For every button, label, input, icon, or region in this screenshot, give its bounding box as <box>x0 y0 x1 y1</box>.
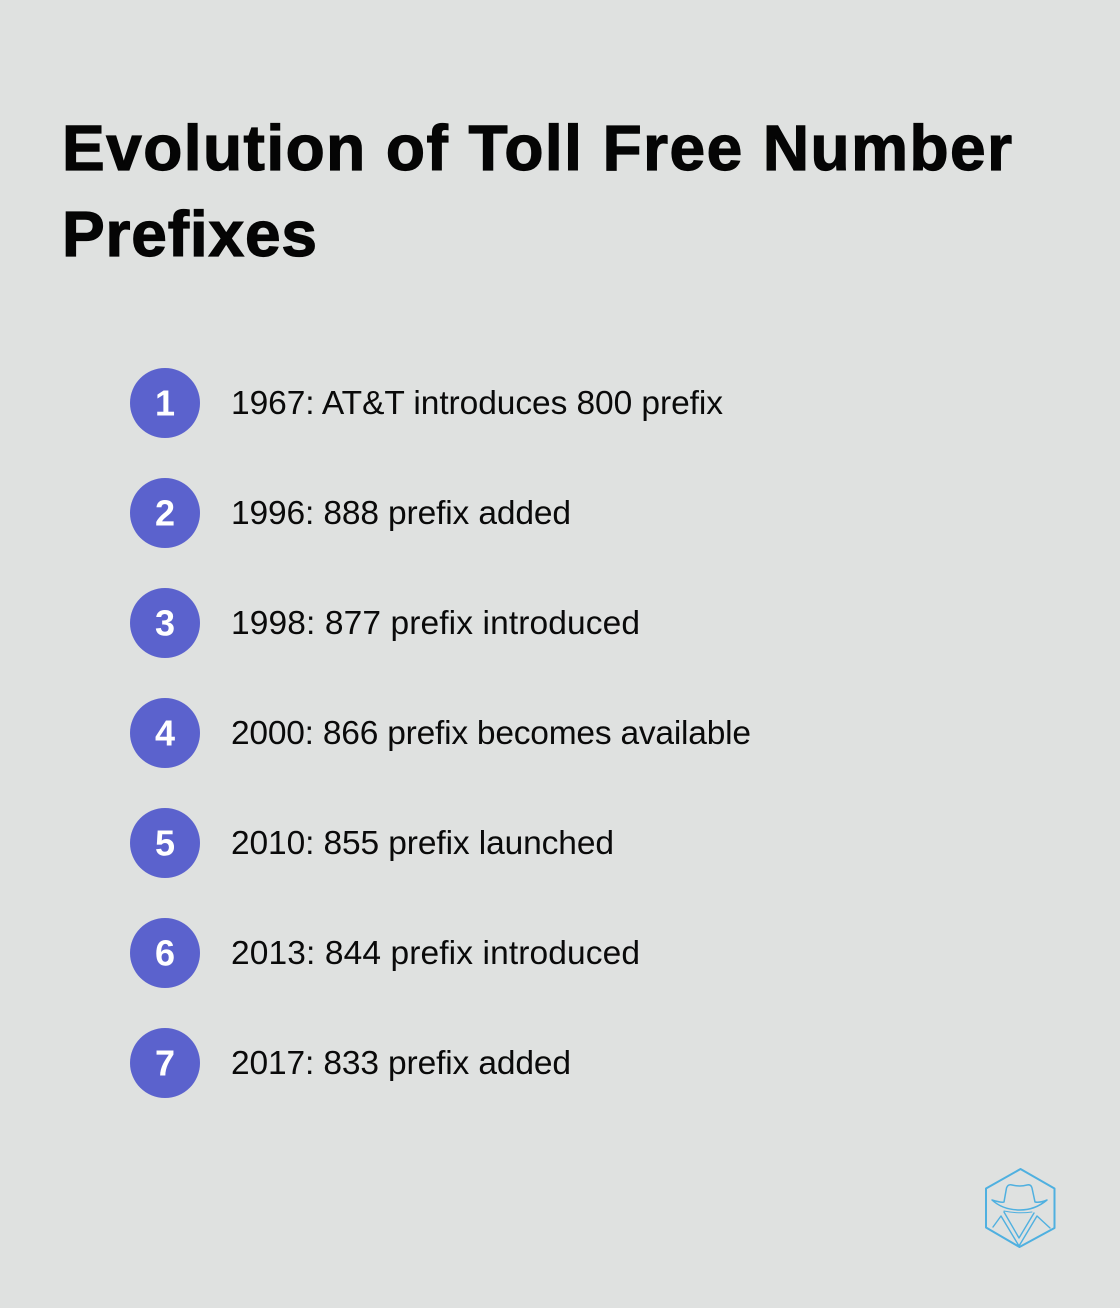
item 5: 2010: 2010: 855 prefix launched <box>231 825 614 862</box>
item 6: 2013: 2013: 844 prefix introduced <box>231 935 640 972</box>
item 3: 1998: 3 <box>155 602 175 644</box>
item 7: 2017 <box>130 1028 571 1098</box>
item 1: 1967: 1 <box>155 382 175 424</box>
item 4: 2000: 2000: 866 prefix becomes available <box>231 715 751 752</box>
item 5: 2010: 5 <box>155 822 175 864</box>
item 2: 1996: 2 <box>155 492 175 534</box>
icon: hexagon logo with hat figure <box>986 1169 1054 1247</box>
item 6: 2013: 6 <box>155 932 175 974</box>
item 2: 1996: 1996: 888 prefix added <box>231 495 571 532</box>
title: Evolution of Toll Free Number <box>62 112 1012 184</box>
item 7: 2017: 2017: 833 prefix added <box>231 1045 571 1082</box>
item 2: 1996 <box>130 478 571 548</box>
item 3: 1998 <box>130 588 640 658</box>
timeline list <box>130 368 751 1098</box>
item 4: 2000 <box>130 698 751 768</box>
item 7: 2017: 7 <box>155 1042 175 1084</box>
item 1: 1967: 1967: AT&T introduces 800 prefix <box>231 385 723 422</box>
item 1: 1967 <box>130 368 723 438</box>
title: Prefixes <box>62 198 317 270</box>
item 4: 2000: 4 <box>155 712 175 754</box>
item 3: 1998: 1998: 877 prefix introduced <box>231 605 640 642</box>
item 5: 2010 <box>130 808 614 878</box>
item 6: 2013 <box>130 918 640 988</box>
title <box>62 112 1012 270</box>
